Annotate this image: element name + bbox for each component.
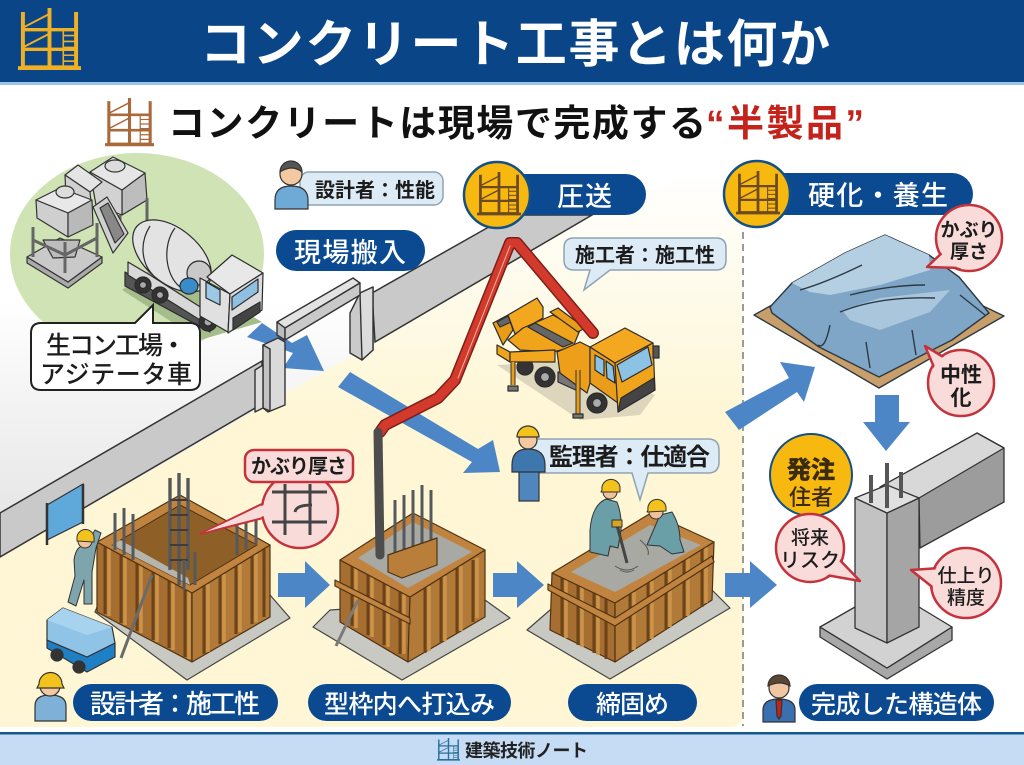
illustration: formwork 3 xyxy=(527,513,730,679)
footer xyxy=(0,727,1024,765)
illustration: formwork 1 xyxy=(95,473,290,680)
illustration: pump boom xyxy=(380,243,593,432)
callout: cover thickness with rebar detail xyxy=(200,450,353,548)
illustration: worker with sign xyxy=(68,529,101,606)
icon: helmeted designer xyxy=(35,672,66,721)
callout: future risk bubble: リスク xyxy=(780,549,840,572)
arrow: down to column xyxy=(863,395,910,451)
step label: curing: 硬化・養生 xyxy=(808,181,948,211)
step label: pour into formwork xyxy=(308,684,511,721)
arrow: step 1 to 2 xyxy=(278,561,330,608)
subtitle: コンクリートは現場で完成する xyxy=(168,103,706,144)
arrow: to curing xyxy=(725,362,815,430)
illustration: batching plant xyxy=(27,157,147,288)
badge: client and residents: 住者 xyxy=(789,485,833,510)
badge: designer performance xyxy=(275,161,443,209)
callout: contractor workability xyxy=(564,238,726,290)
icon: supervisor person xyxy=(512,426,545,501)
illustration: blue cart xyxy=(47,608,115,673)
illustration: blue curing sheet xyxy=(754,235,1004,388)
divider: dashed line xyxy=(742,232,744,726)
callout: cover thickness bubble xyxy=(927,205,1002,271)
illustration: protective sign xyxy=(47,484,83,545)
subtitle: “半製品” xyxy=(706,103,864,144)
step label: finished structure: 完成した構造体 xyxy=(811,691,982,719)
illustration: pump truck xyxy=(493,298,659,420)
badge: client and residents xyxy=(770,434,852,516)
callout: plant and agitator truck xyxy=(31,305,200,390)
badge: designer performance: 設計者：性能 xyxy=(315,179,435,202)
panel: site area xyxy=(0,150,743,727)
step label: designer constructability xyxy=(35,672,278,721)
callout: plant and agitator truck: 生コン工場・ xyxy=(46,332,186,360)
title: コンクリート工事とは何か xyxy=(200,16,830,73)
callout: future risk bubble xyxy=(776,514,860,582)
callout: finish accuracy bubble xyxy=(911,548,1001,618)
callout: supervisor conformity: 監理者：仕適合 xyxy=(549,444,710,471)
illustration: plant circle xyxy=(10,153,264,355)
illustration: gate xyxy=(255,278,373,412)
footer: 建築技術ノート xyxy=(465,740,588,761)
header band xyxy=(0,0,1024,85)
step label: finished structure xyxy=(763,675,994,722)
callout: finish accuracy bubble: 仕上り xyxy=(937,565,995,587)
callout: contractor workability: 施工者：施工性 xyxy=(575,244,715,267)
illustration: concrete hose xyxy=(378,432,380,555)
icon: footer scaffold xyxy=(437,738,460,760)
callout: cover thickness bubble: かぶり xyxy=(940,219,998,241)
icon: pumping scaffold xyxy=(477,172,521,214)
illustration: workers compacting xyxy=(590,479,684,572)
arrow: step 2 to 3 xyxy=(493,561,544,608)
step label: pumping xyxy=(464,162,646,228)
callout: carbonation bubble: 化 xyxy=(950,387,972,410)
arrow: step 3 to structure xyxy=(725,561,777,608)
subtitle xyxy=(105,98,864,145)
arrow: plant to site xyxy=(247,323,324,371)
badge: client and residents: 発注 xyxy=(787,457,835,484)
callout: carbonation bubble: 中性 xyxy=(940,364,982,387)
step label: pumping: 圧送 xyxy=(557,182,612,212)
callout: cover thickness bubble: 厚さ xyxy=(950,241,988,263)
callout: cover thickness with rebar detail: かぶり厚さ xyxy=(251,455,347,478)
callout: future risk bubble: 将来 xyxy=(791,527,829,549)
illustration: finished column and beam xyxy=(820,433,1004,679)
arrow: site to placement xyxy=(338,372,500,473)
step label: compaction xyxy=(568,684,697,721)
step label: site delivery: 現場搬入 xyxy=(294,238,406,268)
step label: designer constructability: 設計者：施工性 xyxy=(90,689,260,719)
step label: pour into formwork: 型枠内へ打込み xyxy=(324,691,495,719)
icon: subtitle scaffold xyxy=(105,98,154,145)
step label: site delivery xyxy=(276,230,425,271)
step label: compaction: 締固め xyxy=(596,691,669,719)
callout: finish accuracy bubble: 精度 xyxy=(947,587,985,609)
icon: header scaffold xyxy=(18,8,81,68)
illustration: formwork 2 xyxy=(313,485,510,680)
icon: rebar detail xyxy=(272,484,327,535)
callout: plant and agitator truck: アジテータ車 xyxy=(40,361,192,389)
icon: designer person xyxy=(275,161,308,209)
step label: curing xyxy=(724,161,973,227)
icon: businessman xyxy=(763,675,795,722)
callout: supervisor conformity xyxy=(530,439,719,500)
callout: carbonation bubble xyxy=(925,346,994,416)
illustration: site wall xyxy=(0,215,592,557)
panel: upper left ground xyxy=(0,85,600,557)
illustration: mixer truck xyxy=(119,206,263,340)
icon: curing scaffold xyxy=(736,171,780,213)
